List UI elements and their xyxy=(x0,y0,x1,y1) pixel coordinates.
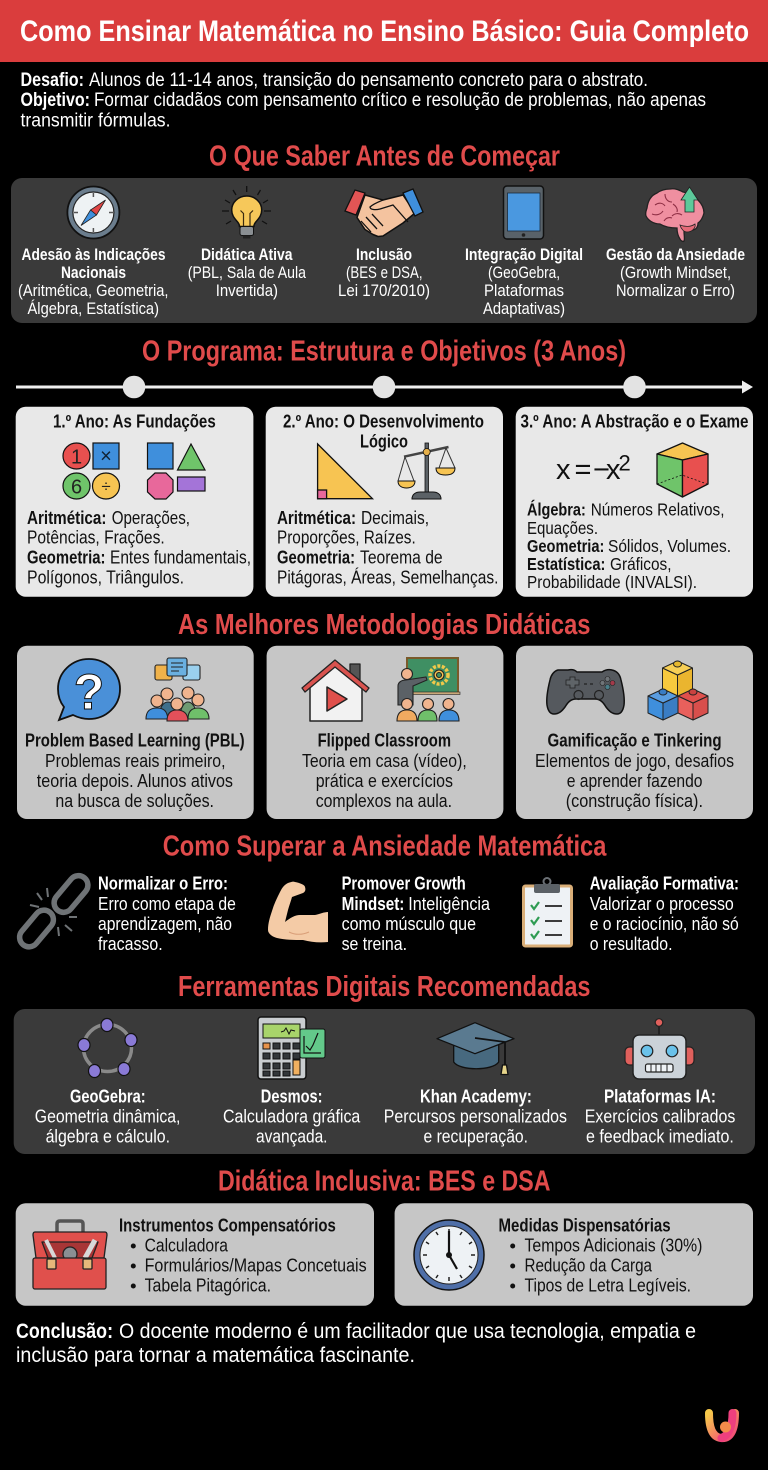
panel: 1º ano xyxy=(16,407,253,597)
text: gestão da ansiedade xyxy=(606,245,745,300)
panel: 3º ano xyxy=(516,407,753,597)
conclusion text: Conclusão: xyxy=(16,1320,113,1343)
text: 2º ano body: Decimais, xyxy=(361,508,429,528)
text: 3º ano body: Gráficos, xyxy=(610,554,672,574)
panel: instrumentos compensatórios xyxy=(16,1203,374,1306)
text: gamificação xyxy=(535,731,734,811)
text: 3º ano body: Números Relativos, xyxy=(591,500,724,520)
text: flipped: complexos na aula. xyxy=(316,791,452,811)
text: khan academy: e recuperação. xyxy=(424,1126,528,1146)
icon: graduation cap xyxy=(437,1023,514,1074)
text: 2º ano body: Geometria: xyxy=(277,548,355,568)
text: 2º ano body xyxy=(277,508,498,588)
icon: question bubble: ? xyxy=(74,664,104,720)
intro text: transmitir fórmulas. xyxy=(20,110,170,132)
intro text: Objetivo: xyxy=(20,90,90,111)
item: normalizar o erro xyxy=(16,872,236,954)
formula: 2 xyxy=(618,451,631,476)
icon: tablet xyxy=(504,186,544,239)
text: instrumentos: Instrumentos Compensatórios xyxy=(119,1216,336,1236)
text: gestão da ansiedade: Normalizar o Erro) xyxy=(616,281,735,300)
intro text: Formar cidadãos com pensamento crítico e resolução de problemas, não apenas xyxy=(94,90,706,111)
text: 1º ano body: Operações, xyxy=(112,508,190,528)
heading: didática inclusiva: Didática Inclusiva: BES e DSA xyxy=(218,1166,550,1198)
text: medidas: Tempos Adicionais (30%) xyxy=(524,1236,702,1256)
text: 3º ano body: Equações. xyxy=(527,518,598,538)
text: flipped xyxy=(302,731,467,811)
icon: cube xyxy=(657,443,708,497)
text: didática ativa: Invertida) xyxy=(216,281,278,300)
icon: clipboard checklist xyxy=(524,878,572,946)
panel: 2º ano xyxy=(266,407,503,597)
text: adesão: (Aritmética, Geometria, xyxy=(18,281,168,300)
text: medidas: Tipos de Letra Legíveis. xyxy=(524,1276,691,1296)
panel: gamificação xyxy=(516,646,753,819)
text: adesão xyxy=(18,245,168,318)
text: PBL: teoria depois. Alunos ativos xyxy=(37,771,233,791)
text: 1º ano body: Aritmética: xyxy=(27,508,106,528)
icon: number symbols: ÷ xyxy=(101,477,111,496)
text: integração digital: (GeoGebra, xyxy=(488,263,560,282)
text: inclusão: (BES e DSA, xyxy=(346,263,422,282)
icon: calculator xyxy=(258,1017,325,1079)
text: medidas xyxy=(498,1216,702,1296)
text: 1º ano body: Potências, Frações. xyxy=(27,528,165,548)
text: khan academy: Khan Academy: xyxy=(420,1086,532,1106)
text: instrumentos: Calculadora xyxy=(145,1236,229,1256)
heading: 2º ano: Lógico xyxy=(360,432,408,452)
text: flipped: Flipped Classroom xyxy=(318,731,451,751)
intro text xyxy=(20,70,706,132)
text: avaliação: Valorizar o processo xyxy=(590,894,734,914)
conclusion text xyxy=(16,1320,696,1367)
text: PBL: Problem Based Learning (PBL) xyxy=(25,731,245,751)
timeline arrow xyxy=(16,376,753,398)
icon: teacher at board xyxy=(397,658,460,721)
text: normalizar: Erro como etapa de xyxy=(98,894,236,914)
icon: number symbols xyxy=(63,443,120,499)
text: geogebra: Geometria dinâmica, xyxy=(35,1106,180,1126)
text: normalizar: fracasso. xyxy=(98,934,163,954)
text: growth: Promover Growth xyxy=(342,873,466,893)
text: gamificação: Elementos de jogo, desafios xyxy=(535,751,734,771)
text: inclusão xyxy=(338,245,430,300)
text: plataformas IA: e feedback imediato. xyxy=(586,1126,734,1146)
text: geogebra xyxy=(35,1086,180,1146)
text: desmos xyxy=(223,1086,361,1146)
text: PBL xyxy=(25,731,245,811)
panel: flipped classroom xyxy=(267,646,503,819)
text: integração digital: Integração Digital xyxy=(465,245,583,264)
intro text: Alunos de 11-14 anos, transição do pensamento concreto para o abstrato. xyxy=(89,70,648,91)
text: medidas: Medidas Dispensatórias xyxy=(498,1216,671,1236)
text: 1º ano body: Geometria: xyxy=(27,548,105,568)
text: inclusão: Lei 170/2010) xyxy=(338,281,430,300)
heading: ansiedade: Como Superar a Ansiedade Matemática xyxy=(163,831,607,863)
icon: right triangle xyxy=(318,444,372,499)
icon: geogebra xyxy=(78,1018,137,1078)
icon: handshake xyxy=(345,189,423,236)
text: integração digital: Plataformas xyxy=(484,281,564,300)
text: inclusão: Inclusão xyxy=(356,245,412,264)
heading: o programa: O Programa: Estrutura e Objetivos (3 Anos) xyxy=(142,336,626,368)
text: desmos: Desmos: xyxy=(261,1086,322,1106)
icon: compass xyxy=(67,186,119,238)
icon: number symbols: 6 xyxy=(71,476,82,498)
icon: flexed muscle xyxy=(268,882,328,942)
text: didática ativa: (PBL, Sala de Aula xyxy=(188,263,306,282)
icon: broken chain xyxy=(16,872,92,951)
text: normalizar xyxy=(98,873,236,954)
text: avaliação xyxy=(590,873,739,954)
text: instrumentos: Formulários/Mapas Concetuais xyxy=(145,1256,367,1276)
text: geogebra: álgebra e cálculo. xyxy=(46,1126,170,1146)
text: medidas: Redução da Carga xyxy=(524,1256,653,1276)
panel: medidas dispensatórias xyxy=(395,1203,753,1306)
text: plataformas IA xyxy=(585,1086,735,1146)
text: gamificação: Gamificação e Tinkering xyxy=(548,731,722,751)
text: integração digital xyxy=(465,245,583,318)
text: plataformas IA: Exercícios calibrados xyxy=(585,1106,735,1126)
text: khan academy xyxy=(384,1086,567,1146)
text: instrumentos: Tabela Pitagórica. xyxy=(145,1276,271,1296)
icon: gamepad xyxy=(547,670,624,714)
panel: ferramentas digitais xyxy=(14,1009,755,1154)
text: adesão: Álgebra, Estatística) xyxy=(28,299,159,318)
heading: metodologias: As Melhores Metodologias Didáticas xyxy=(178,609,590,641)
text: 2º ano body: Teorema de xyxy=(360,548,443,568)
conclusion text: inclusão para tornar a matemática fascinante. xyxy=(16,1344,415,1367)
text: growth xyxy=(342,873,491,954)
heading: 2º ano: 2.º Ano: O Desenvolvimento xyxy=(283,411,484,431)
icon: light bulb xyxy=(222,186,271,238)
text: gamificação: (construção física). xyxy=(566,791,703,811)
text: integração digital: Adaptativas) xyxy=(483,299,565,318)
icon: house with play xyxy=(302,660,369,721)
text: adesão: Adesão às Indicações xyxy=(22,245,166,264)
text: flipped: Teoria em casa (vídeo), xyxy=(302,751,467,771)
text: instrumentos xyxy=(119,1216,367,1296)
text: 3º ano body: Álgebra: xyxy=(527,499,586,520)
text: normalizar: Normalizar o Erro: xyxy=(98,873,228,893)
panel: PBL xyxy=(17,646,254,819)
item: avaliação formativa xyxy=(524,873,739,954)
text: avaliação: e o raciocínio, não só xyxy=(590,914,739,934)
text: 1º ano body: Entes fundamentais, xyxy=(110,548,251,568)
item: growth mindset xyxy=(268,873,491,954)
text: 1º ano body xyxy=(27,508,251,588)
icon: brain with arrow xyxy=(646,187,704,241)
text: 3º ano body: Estatística: xyxy=(527,554,605,574)
text: plataformas IA: Plataformas IA: xyxy=(604,1086,716,1106)
text: normalizar: aprendizagem, não xyxy=(98,914,232,934)
text: growth: Mindset: xyxy=(342,894,404,914)
text: 3º ano body: Probabilidade (INVALSI). xyxy=(527,572,697,592)
text: 3º ano body xyxy=(527,499,731,592)
text: gestão da ansiedade: (Growth Mindset, xyxy=(620,263,731,282)
icon: question bubble xyxy=(58,659,120,720)
heading: o que saber: O Que Saber Antes de Começar xyxy=(209,140,560,172)
text: avaliação: o resultado. xyxy=(590,934,672,954)
icon: toolbox xyxy=(33,1221,107,1289)
text: didática ativa xyxy=(188,245,306,300)
text: PBL: Problemas reais primeiro, xyxy=(45,751,226,771)
text: growth: se treina. xyxy=(342,934,407,954)
intro text: Desafio: xyxy=(20,70,84,91)
logo xyxy=(709,1413,735,1438)
title banner xyxy=(0,0,768,62)
icon: number symbols: 1 xyxy=(71,446,82,468)
text: flipped: prática e exercícios xyxy=(316,771,453,791)
icon: building blocks xyxy=(648,661,708,720)
text: growth: Inteligência xyxy=(408,894,491,914)
icon: clock xyxy=(414,1220,484,1290)
icon: geometric shapes xyxy=(148,443,205,499)
text: 2º ano body: Pitágoras, Áreas, Semelhanças. xyxy=(277,568,498,588)
heading: 2º ano xyxy=(283,411,484,452)
text: PBL: na busca de soluções. xyxy=(55,791,214,811)
text: gamificação: e aprender fazendo xyxy=(567,771,702,791)
icon: number symbols: × xyxy=(100,446,112,468)
heading: ferramentas: Ferramentas Digitais Recomendadas xyxy=(178,971,590,1003)
text: desmos: avançada. xyxy=(256,1126,328,1146)
icon: balance scale xyxy=(398,443,455,499)
formula: x = −x xyxy=(556,454,621,486)
text: khan academy: Percursos personalizados xyxy=(384,1106,567,1126)
heading: 1º ano: 1.º Ano: As Fundações xyxy=(53,411,216,431)
icon: group of people xyxy=(146,658,209,721)
text: 1º ano body: Polígonos, Triângulos. xyxy=(27,568,184,588)
panel: o que saber antes de começar xyxy=(11,178,757,323)
text: adesão: Nacionais xyxy=(61,263,126,282)
text: 3º ano body: Sólidos, Volumes. xyxy=(608,536,731,556)
text: avaliação: Avaliação Formativa: xyxy=(590,873,739,893)
conclusion text: O docente moderno é um facilitador que usa tecnologia, empatia e xyxy=(119,1320,696,1343)
text: desmos: Calculadora gráfica xyxy=(223,1106,361,1126)
text: 2º ano body: Aritmética: xyxy=(277,508,356,528)
text: geogebra: GeoGebra: xyxy=(70,1086,146,1106)
text: growth: como músculo que xyxy=(342,914,476,934)
icon: robot xyxy=(625,1019,694,1079)
text: didática ativa: Didática Ativa xyxy=(201,245,293,264)
text: 2º ano body: Proporções, Raízes. xyxy=(277,528,416,548)
text: 3º ano body: Geometria: xyxy=(527,536,604,556)
